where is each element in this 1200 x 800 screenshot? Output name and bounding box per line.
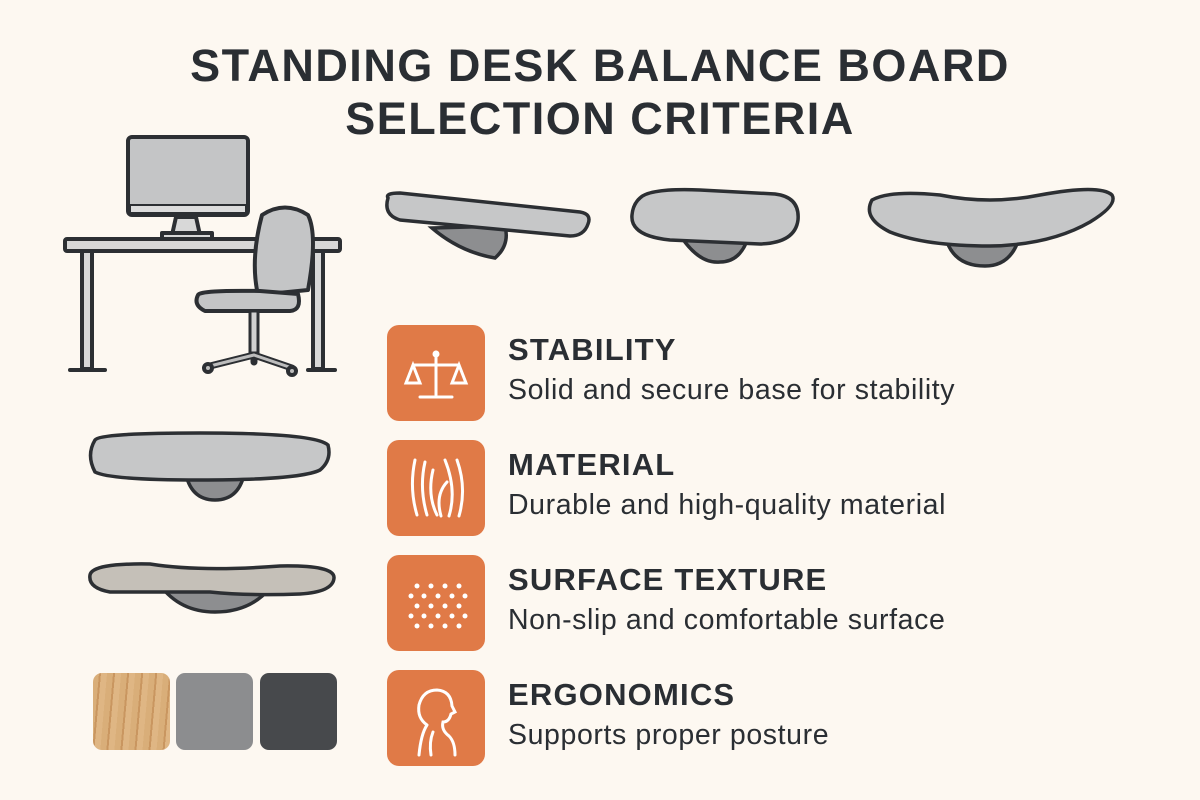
text: SURFACE TEXTURE — [508, 562, 827, 597]
icon: person posture — [387, 670, 485, 766]
text: Non-slip and comfortable surface — [508, 604, 945, 636]
title: STANDING DESK BALANCE BOARD — [190, 40, 1010, 91]
text: ERGONOMICS — [508, 677, 735, 712]
icon: dots — [387, 555, 485, 651]
text: Supports proper posture — [508, 719, 829, 751]
surface texture text — [508, 562, 945, 636]
swatch: wood — [93, 673, 170, 750]
title — [190, 40, 1010, 144]
text: STABILITY — [508, 332, 677, 367]
stability text — [508, 332, 955, 406]
text: MATERIAL — [508, 447, 675, 482]
icon: wood grain — [387, 440, 485, 536]
text: Solid and secure base for stability — [508, 374, 955, 406]
material text — [508, 447, 946, 521]
ergonomics text — [508, 677, 829, 751]
icon: scales — [387, 325, 485, 421]
swatch: grey — [176, 673, 253, 750]
title: SELECTION CRITERIA — [345, 93, 855, 144]
text: Durable and high-quality material — [508, 489, 946, 521]
swatch: charcoal — [260, 673, 337, 750]
